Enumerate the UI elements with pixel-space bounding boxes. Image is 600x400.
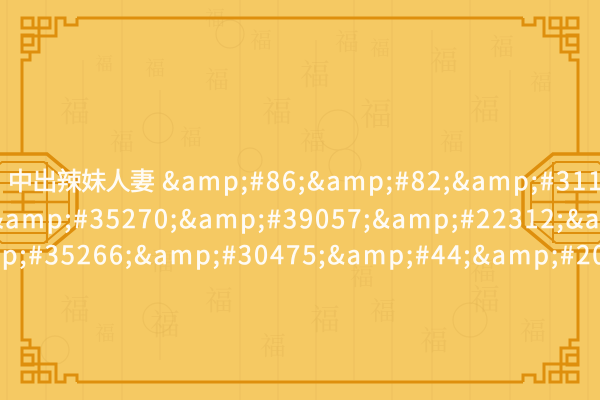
background paper with faint pattern: 福 (60, 87, 90, 131)
background paper with faint pattern: 福 (150, 300, 180, 344)
background paper with faint pattern: 福 (350, 257, 374, 292)
background paper with faint pattern: 福 (470, 85, 500, 129)
background paper with faint pattern: 福 (145, 52, 165, 81)
background paper with faint pattern: 福 (370, 291, 396, 328)
background paper with faint pattern: 福 (300, 50, 330, 94)
background paper with faint pattern: 福 (310, 295, 340, 339)
background paper with faint pattern: 福 (420, 319, 448, 359)
background paper with faint pattern: 福 (520, 311, 546, 348)
background paper with faint pattern: 福 (470, 275, 500, 319)
background paper with faint pattern: 福 (370, 32, 390, 61)
background paper with faint pattern: 福 (260, 326, 286, 363)
background paper with faint pattern: 福 (180, 121, 202, 152)
octagon lattice ornaments (0, 154, 600, 251)
background paper with faint pattern: 福 (95, 50, 113, 76)
background paper with faint pattern: 福 (205, 2, 225, 31)
background paper with faint pattern: 福 (490, 27, 514, 62)
background paper with faint pattern: 福 (150, 242, 174, 277)
background paper with faint pattern: 福 (110, 122, 134, 157)
background paper with faint pattern: 福 (262, 87, 292, 131)
background paper with faint pattern: 福 (250, 24, 272, 55)
background paper with faint pattern: 福 (205, 60, 229, 95)
background paper with faint pattern: 福 (470, 251, 496, 288)
background paper with faint pattern: 福 (60, 285, 90, 329)
background paper with faint pattern: 福 (360, 89, 392, 135)
background paper with faint pattern: 福 (440, 122, 464, 157)
background paper with faint pattern: 福 (530, 66, 552, 97)
background paper with faint pattern: 福 (95, 317, 115, 346)
background paper with faint pattern: 福 (300, 121, 326, 158)
background paper with faint pattern: 福 (430, 39, 458, 79)
background paper with faint pattern: 福 (335, 22, 359, 57)
background paper with faint pattern: 福 (205, 279, 233, 319)
